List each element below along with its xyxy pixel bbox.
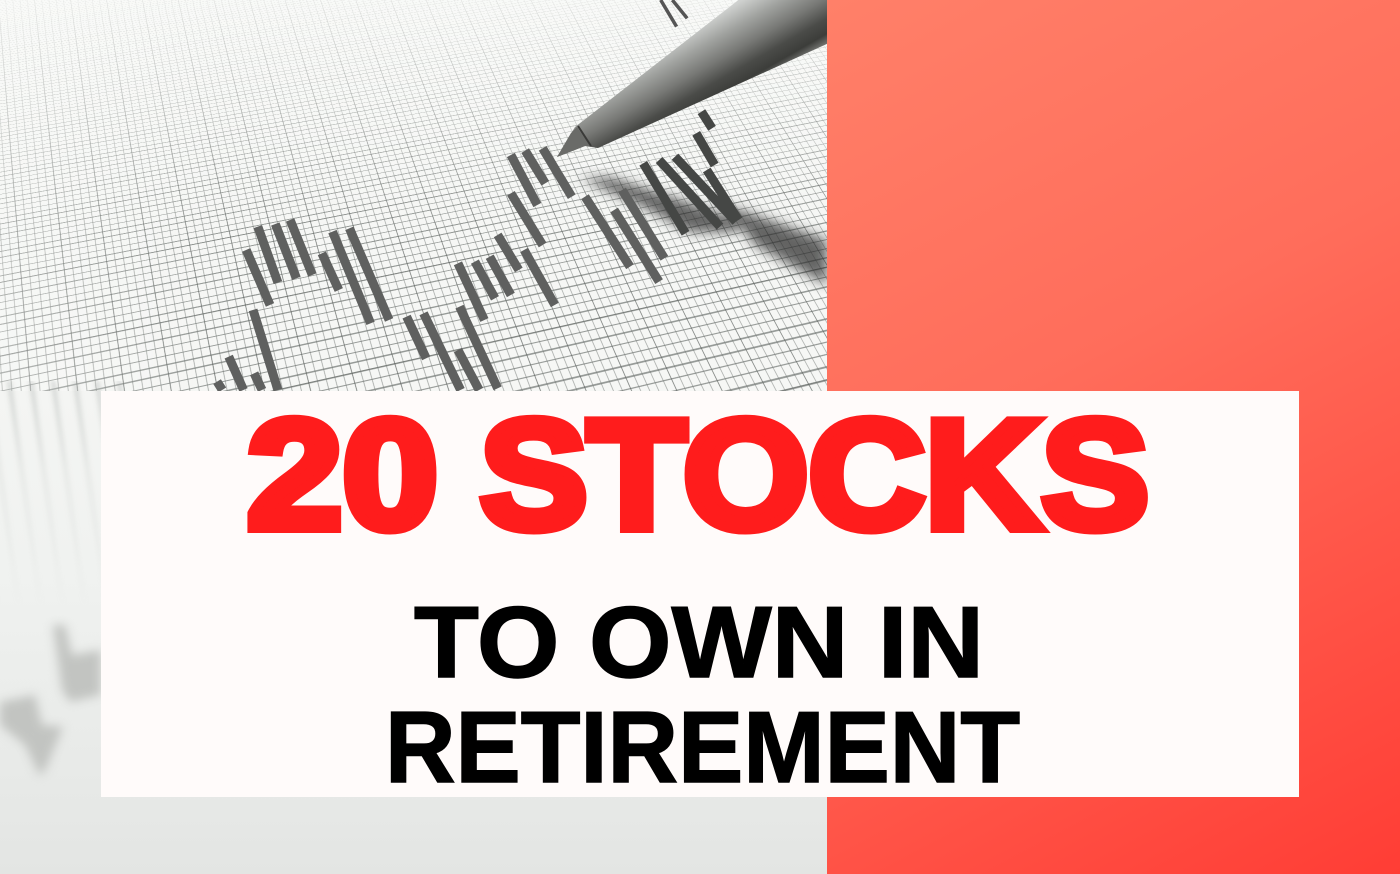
blurred grid streaks: [6, 381, 124, 472]
headline: 20 STOCKS: STOCKS: [480, 388, 1149, 561]
subheading: RETIREMENT: RETIREMENT: [385, 692, 1020, 804]
chart bars: [217, 0, 739, 390]
headline: 20 STOCKS: 20: [247, 388, 438, 561]
stock chart bars and pen: [213, 0, 827, 391]
subheading: TO OWN IN: TO OWN IN: [414, 587, 984, 699]
white title card: [101, 391, 1299, 797]
pen shadow: [580, 178, 827, 285]
blurred chart shape: [0, 621, 101, 776]
graph paper grid: [0, 0, 827, 391]
blurred lower part of the photo: [0, 391, 827, 874]
pen: [557, 0, 829, 157]
photo panel: pen on stock chart: [0, 0, 827, 874]
coral gradient panel: [827, 0, 1400, 874]
